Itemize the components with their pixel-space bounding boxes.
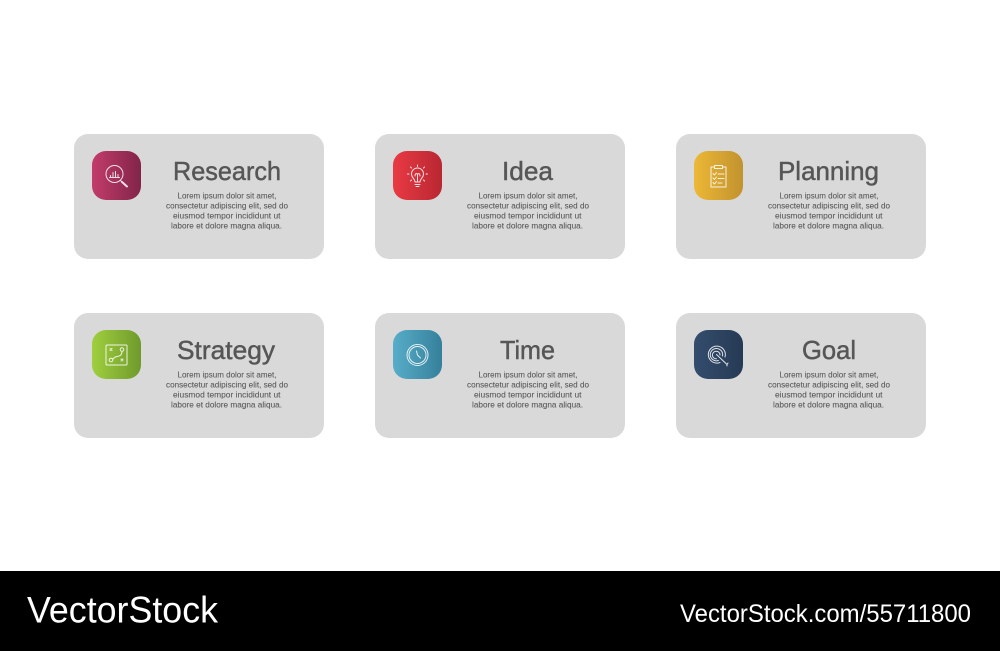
text block: strategy: labore et dolore magna aliqua.	[171, 400, 282, 410]
text block: research	[166, 191, 288, 231]
text block: idea: Lorem ipsum dolor sit amet,	[478, 191, 578, 201]
text block: idea: consectetur adipiscing elit, sed do	[467, 201, 589, 211]
icon: light bulb	[393, 151, 442, 200]
text block: strategy: consectetur adipiscing elit, sed do	[166, 380, 288, 390]
text block: goal: Lorem ipsum dolor sit amet,	[780, 370, 878, 380]
text block: planning	[768, 191, 890, 231]
text block: research: Lorem ipsum dolor sit amet,	[178, 191, 276, 201]
text block: goal: eiusmod tempor incididunt ut	[775, 390, 883, 400]
text block: time: eiusmod tempor incididunt ut	[474, 390, 582, 400]
text block: time	[467, 370, 589, 410]
heading: goal: Goal	[802, 335, 856, 365]
text block: strategy: eiusmod tempor incididunt ut	[173, 390, 281, 400]
heading: research: Research	[173, 156, 281, 186]
text block: research: consectetur adipiscing elit, sed do	[166, 201, 288, 211]
panel: planning	[676, 134, 926, 259]
text block: goal	[768, 370, 890, 410]
text block: time: consectetur adipiscing elit, sed do	[467, 380, 589, 390]
footer url: VectorStock.com/55711800	[680, 600, 971, 628]
heading: strategy: Strategy	[177, 335, 275, 365]
panel: goal	[676, 313, 926, 438]
text block: planning: labore et dolore magna aliqua.	[773, 221, 884, 231]
text block: strategy: Lorem ipsum dolor sit amet,	[178, 370, 276, 380]
text block: idea: labore et dolore magna aliqua.	[472, 221, 583, 231]
panel: time	[375, 313, 625, 438]
icon: target	[694, 330, 743, 379]
panel: idea	[375, 134, 625, 259]
text block: planning: Lorem ipsum dolor sit amet,	[780, 191, 878, 201]
text block: idea	[467, 191, 589, 231]
icon: clock	[393, 330, 442, 379]
heading: time: Time	[500, 335, 555, 365]
text block: goal: consectetur adipiscing elit, sed do	[768, 380, 890, 390]
text block: planning: consectetur adipiscing elit, sed do	[768, 201, 890, 211]
icon: magnifier with chart	[92, 151, 141, 200]
icon: strategy board	[92, 330, 141, 379]
text block: time: labore et dolore magna aliqua.	[472, 400, 583, 410]
footer band	[0, 571, 1000, 651]
text block: strategy	[166, 370, 288, 410]
heading: planning: Planning	[778, 156, 879, 186]
icon: clipboard checklist	[694, 151, 743, 200]
text block: research: labore et dolore magna aliqua.	[171, 221, 282, 231]
heading: idea: Idea	[502, 156, 554, 186]
text block: goal: labore et dolore magna aliqua.	[773, 400, 884, 410]
text block: idea: eiusmod tempor incididunt ut	[474, 211, 582, 221]
panel: research	[74, 134, 324, 259]
text block: planning: eiusmod tempor incididunt ut	[775, 211, 883, 221]
text block: research: eiusmod tempor incididunt ut	[173, 211, 281, 221]
panel: strategy	[74, 313, 324, 438]
footer logo: VectorStock	[27, 590, 218, 630]
text block: time: Lorem ipsum dolor sit amet,	[478, 370, 578, 380]
